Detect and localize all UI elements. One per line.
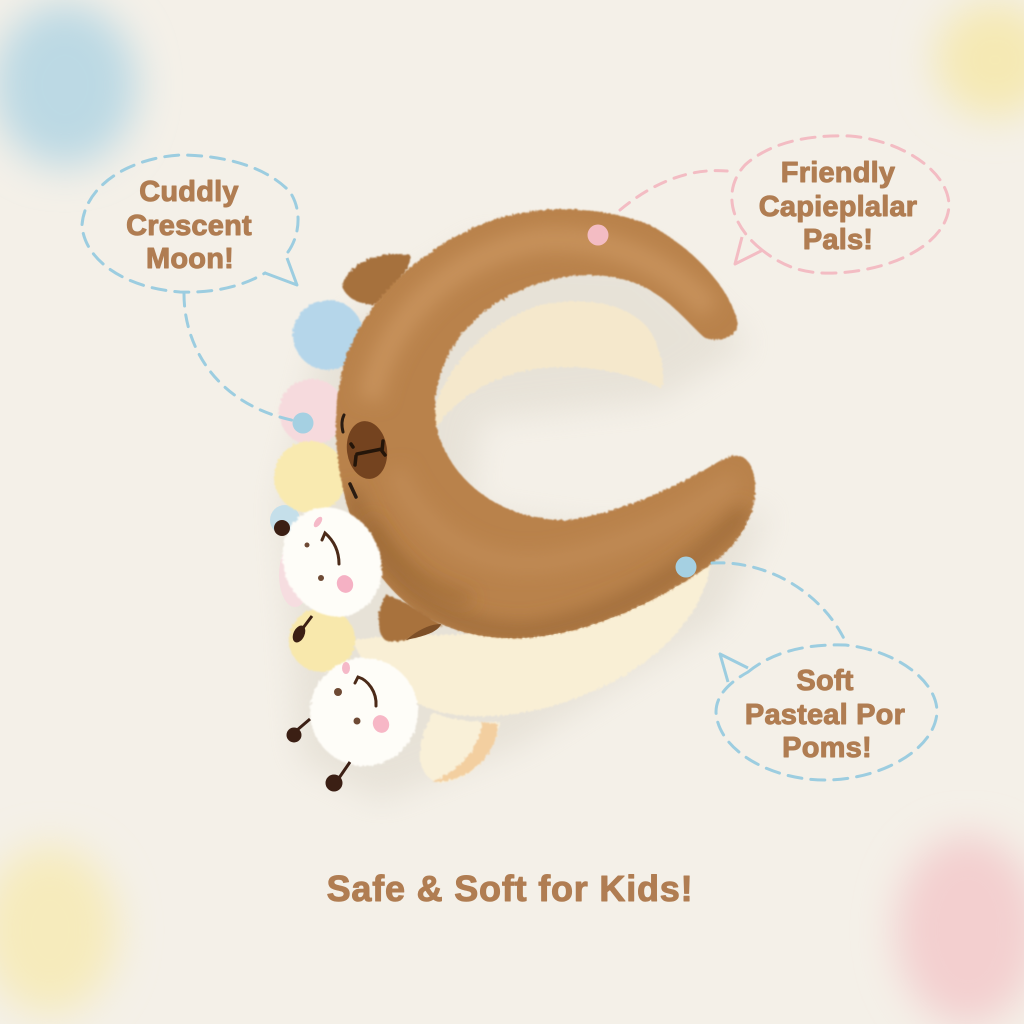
- small pink pom behind: [279, 543, 311, 607]
- decorative blurred yellow blob top right: [935, 2, 1024, 118]
- leader line: [712, 563, 847, 645]
- pointer solid: [720, 654, 748, 682]
- bubble outline: [716, 645, 937, 780]
- plush headband product: [265, 209, 770, 800]
- yellow pom lower: [289, 608, 355, 672]
- label: Pals!: [803, 224, 873, 256]
- cream back crescent upper: [432, 301, 663, 430]
- label: Soft: [796, 665, 854, 697]
- cream back crescent lower: [352, 555, 712, 716]
- dark fur seam: [378, 529, 466, 602]
- antenna lower left: [286, 719, 310, 742]
- antenna mid: [290, 616, 312, 644]
- pointer solid: [265, 258, 297, 285]
- pink pom: [279, 379, 345, 445]
- lighter mid band: [718, 496, 719, 497]
- antenna bottom: [326, 762, 350, 792]
- anchor dot: [676, 556, 696, 578]
- leader line: [620, 171, 735, 210]
- callout: soft pom poms: [676, 556, 937, 780]
- small blue pom behind: [270, 505, 300, 535]
- brown ear top: [343, 254, 410, 305]
- cream foot: [420, 712, 500, 783]
- decorative blurred pink blob bottom right: [896, 835, 1024, 1024]
- white pom face lower: [310, 658, 418, 766]
- label: Friendly: [781, 157, 895, 189]
- capybara eye bottom: [350, 484, 356, 497]
- bubble outline: [82, 155, 298, 292]
- capybara nose: [343, 418, 391, 482]
- leader line: [184, 294, 296, 421]
- white pom face upper: [265, 491, 399, 633]
- label: Crescent: [126, 210, 252, 242]
- decorative blurred yellow blob bottom left: [0, 846, 118, 1014]
- capybara eye top: [342, 415, 344, 432]
- fur lower shadow: [350, 490, 745, 632]
- yellow pom upper: [274, 441, 346, 513]
- fur highlight: [370, 239, 710, 400]
- blue pom: [293, 300, 363, 370]
- antenna upper left: [274, 520, 290, 536]
- decorative blurred blue blob: [0, 3, 137, 167]
- bottom tagline: Safe & Soft for Kids!: [327, 868, 693, 909]
- brown ear lower: [379, 595, 442, 641]
- label: Capieplalar: [759, 191, 917, 223]
- anchor dot: [292, 412, 314, 434]
- anchor dot: [588, 224, 608, 246]
- label: Cuddly: [139, 176, 239, 208]
- brown crescent moon: [336, 209, 755, 638]
- callout: friendly pals: [588, 136, 949, 273]
- label: Poms!: [782, 732, 872, 764]
- label: Moon!: [146, 243, 234, 275]
- ear inner: [406, 624, 441, 640]
- pointer solid: [735, 237, 763, 264]
- drop shadow: [280, 240, 770, 800]
- callout: cuddly crescent moon: [82, 155, 314, 434]
- label: Pasteal Por: [745, 699, 905, 731]
- bubble outline: [732, 136, 949, 273]
